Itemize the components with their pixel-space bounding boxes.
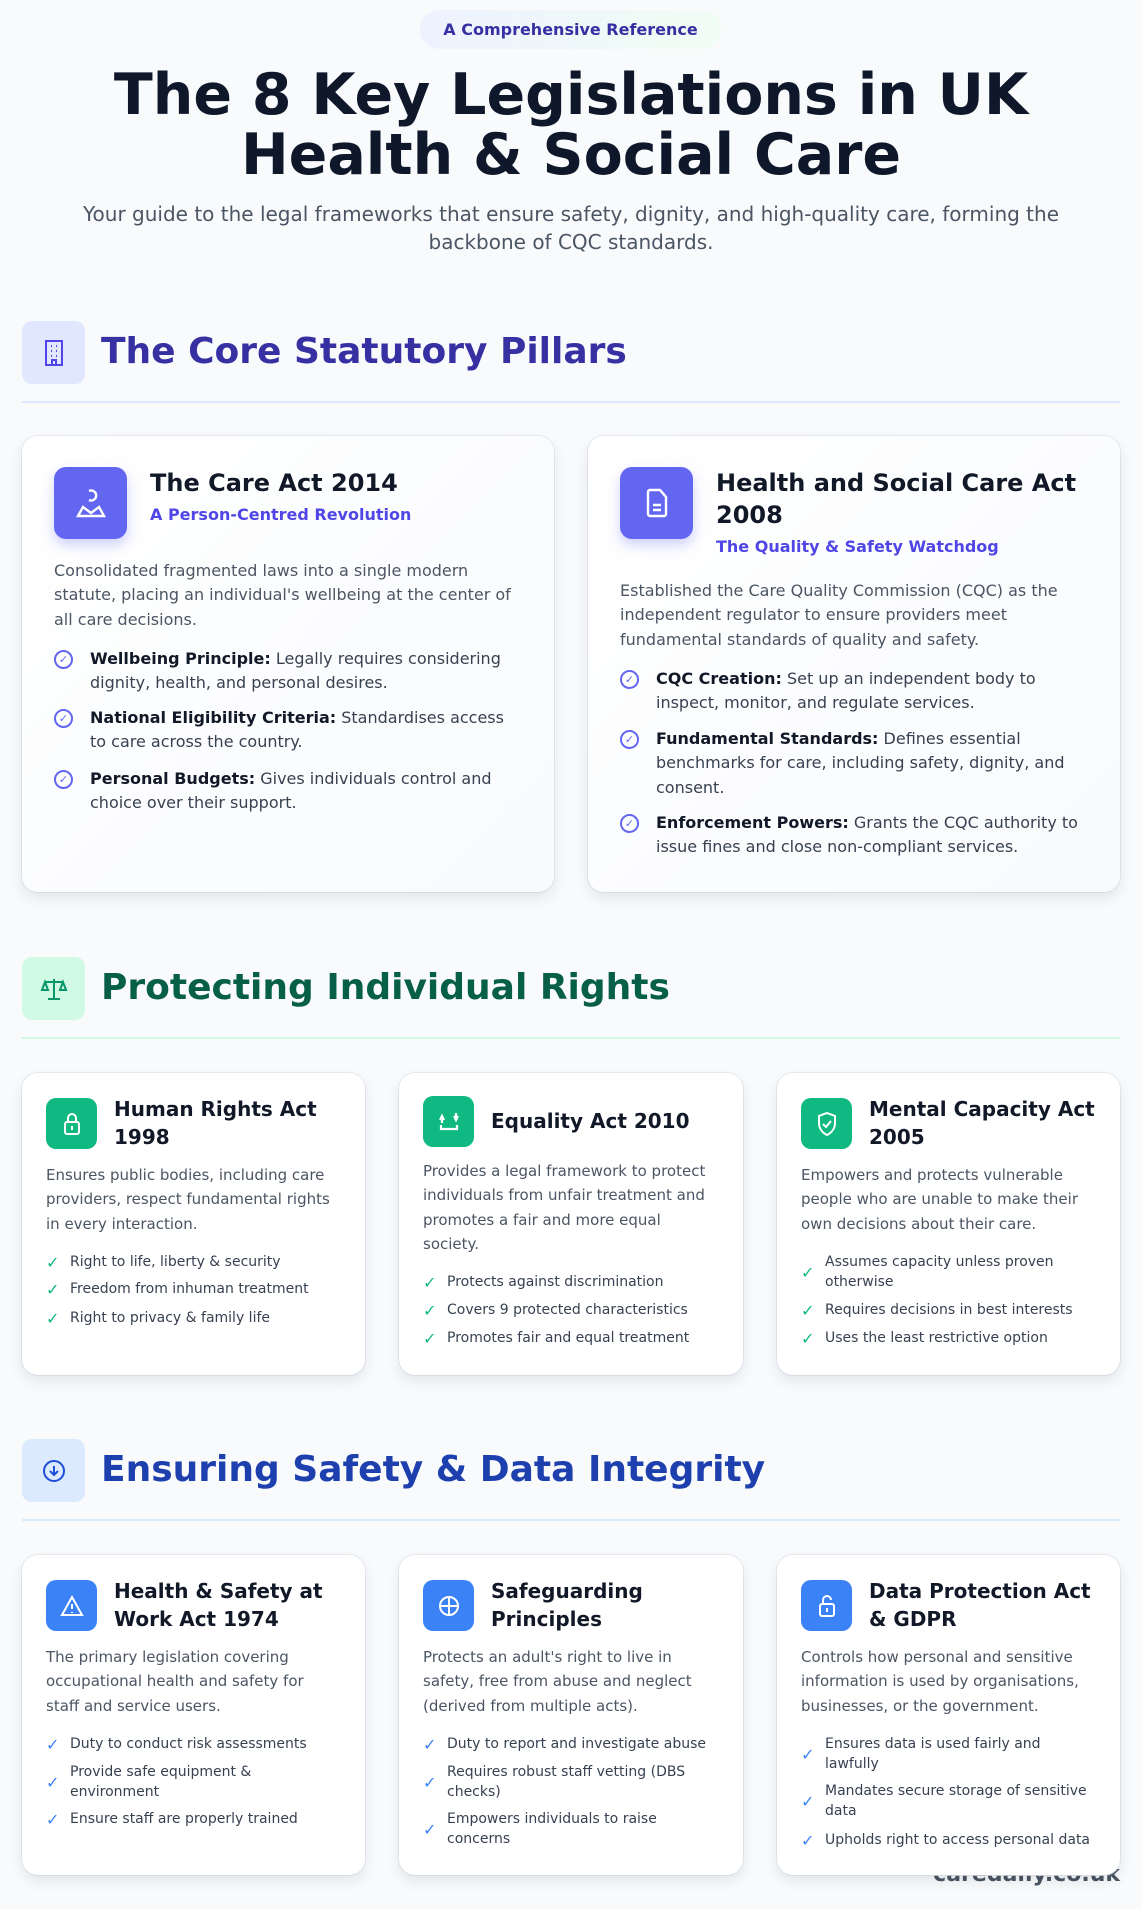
icon: lock (46, 1098, 97, 1149)
title: Data Protection Act & GDPR (869, 1579, 1091, 1631)
bullet: ✓ (46, 1309, 59, 1328)
icon: building (22, 321, 85, 384)
title: Health & Safety at Work Act 1974 (114, 1579, 323, 1631)
icon: document (620, 467, 693, 539)
bullet: ✓ (423, 1301, 436, 1320)
panel: Equality Act 2010 (399, 1073, 743, 1375)
bullet: ✓ (423, 1273, 436, 1292)
bullet: Freedom from inhuman treatment (70, 1281, 309, 1297)
bullet: Wellbeing Principle: Legally requires considering dignity, health, and personal desires. (90, 649, 501, 692)
icon: person care (54, 467, 127, 539)
bullet: ✓ (625, 733, 634, 746)
panel: Health and Social Care Act 2008 (588, 436, 1120, 892)
description: The primary legislation covering occupational health and safety for staff and service users. (46, 1648, 304, 1715)
bullet: Requires robust staff vetting (DBS checks) (447, 1764, 685, 1800)
section header: safety & data (22, 1439, 765, 1502)
bullet: Personal Budgets: Gives individuals control and choice over their support. (90, 769, 492, 812)
icon: download circle (22, 1439, 85, 1502)
panel: Data Protection Act & GDPR (777, 1555, 1120, 1875)
subtitle: Your guide to the legal frameworks that ensure safety, dignity, and high-quality care, forming the backbone of CQC standards. (83, 202, 1059, 254)
panel: Safeguarding Principles (399, 1555, 743, 1875)
bullet: Promotes fair and equal treatment (447, 1330, 689, 1346)
icon: crosshair (423, 1580, 474, 1631)
heading: The Core Statutory Pillars (101, 331, 627, 372)
description: Protects an adult's right to live in safety, free from abuse and neglect (derived from multiple acts). (423, 1648, 692, 1715)
description: Established the Care Quality Commission (CQC) as the independent regulator to ensure providers meet fundamental standards of quality and safety. (620, 581, 1058, 649)
bullet: ✓ (801, 1263, 814, 1282)
section header: core statutory pillars (22, 321, 627, 384)
bullet: Protects against discrimination (447, 1274, 664, 1290)
title: Equality Act 2010 (491, 1109, 690, 1133)
title: The Care Act 2014 (150, 469, 398, 497)
subtitle: A Person-Centred Revolution (150, 505, 411, 524)
heading: Ensuring Safety & Data Integrity (101, 1449, 765, 1490)
bullet: ✓ (46, 1280, 59, 1299)
bullet: ✓ (423, 1820, 436, 1839)
bullet: ✓ (423, 1329, 436, 1348)
badge: A Comprehensive Reference (443, 20, 698, 39)
bullet: Duty to report and investigate abuse (447, 1736, 706, 1752)
bullet: CQC Creation: Set up an independent body to inspect, monitor, and regulate services. (656, 669, 1036, 712)
icon: warning (46, 1580, 97, 1631)
bullet: Ensures data is used fairly and lawfully (825, 1736, 1041, 1772)
bullet: ✓ (59, 653, 68, 666)
panel: Human Rights Act 1998 (22, 1073, 365, 1375)
title: Health and Social Care Act 2008 (716, 469, 1076, 529)
bullet: Empowers individuals to raise concerns (447, 1811, 657, 1846)
description: Controls how personal and sensitive information is used by organisations, businesses, or the government. (801, 1648, 1079, 1715)
icon: shield (801, 1098, 852, 1149)
bullet: ✓ (801, 1329, 814, 1348)
bullet: ✓ (801, 1831, 814, 1850)
bullet: ✓ (46, 1810, 59, 1829)
description: Ensures public bodies, including care providers, respect fundamental rights in every interaction. (46, 1166, 330, 1233)
section header: protecting individual rights (22, 957, 670, 1020)
bullet: Right to privacy & family life (70, 1310, 270, 1326)
bullet: Uses the least restrictive option (825, 1330, 1048, 1346)
icon: arrows (423, 1096, 474, 1147)
bullet: Enforcement Powers: Grants the CQC authority to issue fines and close non-compliant services. (656, 813, 1078, 856)
description: Empowers and protects vulnerable people who are unable to make their own decisions about their care. (801, 1166, 1078, 1233)
bullet: Ensure staff are properly trained (70, 1811, 298, 1827)
bullet: National Eligibility Criteria: Standardises access to care across the country. (90, 708, 504, 751)
panel: Health & Safety at Work Act 1974 (22, 1555, 365, 1875)
bullet: Fundamental Standards: Defines essential benchmarks for care, including safety, dignity, and consent. (656, 729, 1065, 797)
bullet: Covers 9 protected characteristics (447, 1302, 688, 1318)
bullet: ✓ (59, 712, 68, 725)
title (114, 62, 1030, 188)
title: Mental Capacity Act 2005 (869, 1097, 1095, 1149)
badge (420, 10, 721, 49)
bullet: ✓ (625, 673, 634, 686)
icon: unlocked padlock (801, 1580, 852, 1631)
bullet: Mandates secure storage of sensitive data (825, 1783, 1087, 1818)
subtitle: The Quality & Safety Watchdog (716, 537, 999, 556)
description: Consolidated fragmented laws into a single modern statute, placing an individual's wellbeing at the center of all care decisions. (54, 561, 511, 629)
bullet: ✓ (59, 773, 68, 786)
panel: Mental Capacity Act 2005 (777, 1073, 1120, 1375)
bullet: Right to life, liberty & security (70, 1254, 281, 1270)
bullet: Provide safe equipment & environment (70, 1764, 251, 1800)
bullet: Upholds right to access personal data (825, 1832, 1090, 1848)
bullet: Assumes capacity unless proven otherwise (825, 1254, 1054, 1290)
heading: Protecting Individual Rights (101, 967, 670, 1008)
footer: site name: caredaily.co.uk (933, 1862, 1120, 1887)
title: Safeguarding Principles (491, 1579, 643, 1631)
bullet: ✓ (46, 1773, 59, 1792)
panel: Care Act 2014 (22, 436, 554, 892)
bullet: ✓ (801, 1792, 814, 1811)
bullet: ✓ (46, 1735, 59, 1754)
title: Health & Social Care (241, 122, 901, 188)
description: Provides a legal framework to protect individuals from unfair treatment and promotes a fair and more equal society. (423, 1162, 705, 1253)
bullet: ✓ (423, 1773, 436, 1792)
bullet: Duty to conduct risk assessments (70, 1736, 307, 1752)
bullet: ✓ (46, 1253, 59, 1272)
bullet: ✓ (801, 1745, 814, 1764)
icon: scales (22, 957, 85, 1020)
title: Human Rights Act 1998 (114, 1097, 317, 1149)
bullet: ✓ (801, 1301, 814, 1320)
bullet: ✓ (423, 1735, 436, 1754)
bullet: ✓ (625, 817, 634, 830)
title: The 8 Key Legislations in UK (114, 62, 1028, 128)
bullet: Requires decisions in best interests (825, 1302, 1073, 1318)
